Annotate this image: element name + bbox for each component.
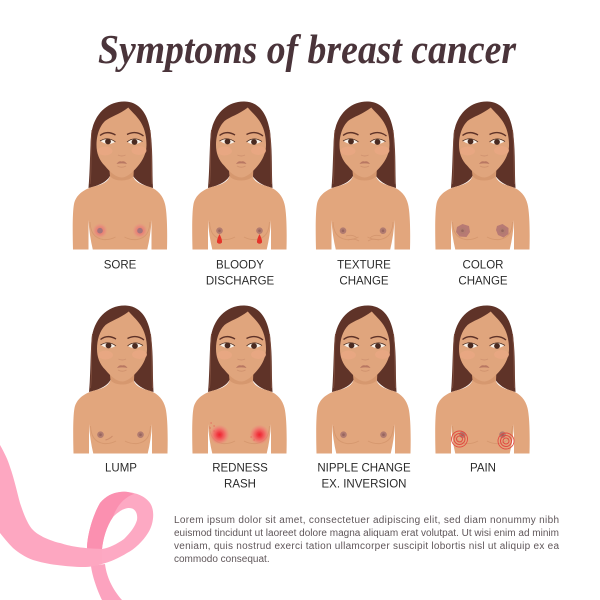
ribbon [0, 445, 153, 600]
title: Symptoms of breast cancer [98, 26, 517, 72]
label: lump: LUMP [105, 462, 137, 474]
label: bloody discharge: BLOODY [216, 260, 264, 272]
label: nipple change: EX. INVERSION [322, 478, 406, 490]
figure: pain [435, 305, 530, 454]
figure: nipple change [316, 305, 411, 454]
label: color change: CHANGE [458, 276, 508, 288]
text block [174, 515, 559, 565]
label: bloody discharge: DISCHARGE [206, 276, 275, 288]
text block: commodo consequat. [174, 554, 270, 565]
text block: veniam, quis nostrud exerci tation ullamcorper suscipit lobortis nisl ut aliquip ex ea [174, 541, 559, 552]
label: nipple change: NIPPLE CHANGE [317, 462, 411, 474]
label: texture change: TEXTURE [337, 260, 391, 272]
figure: lump [73, 305, 168, 454]
label: pain: PAIN [470, 462, 496, 474]
figure: redness rash [192, 305, 287, 454]
figure: color change [435, 101, 530, 250]
figure: texture change [316, 101, 410, 250]
figure: sore [73, 101, 167, 250]
text block: euismod tincidunt ut laoreet dolore magna aliquam erat volutpat. Ut wisi enim ad minim [174, 528, 559, 539]
label: sore: SORE [104, 260, 137, 272]
label: redness rash: REDNESS [212, 462, 268, 474]
label: redness rash: RASH [224, 478, 256, 490]
label: color change: COLOR [463, 260, 503, 272]
label: texture change: CHANGE [339, 276, 389, 288]
figure: bloody discharge [192, 101, 287, 250]
text block: Lorem ipsum dolor sit amet, consectetuer adipiscing elit, sed diam nonummy nibh [174, 515, 559, 526]
